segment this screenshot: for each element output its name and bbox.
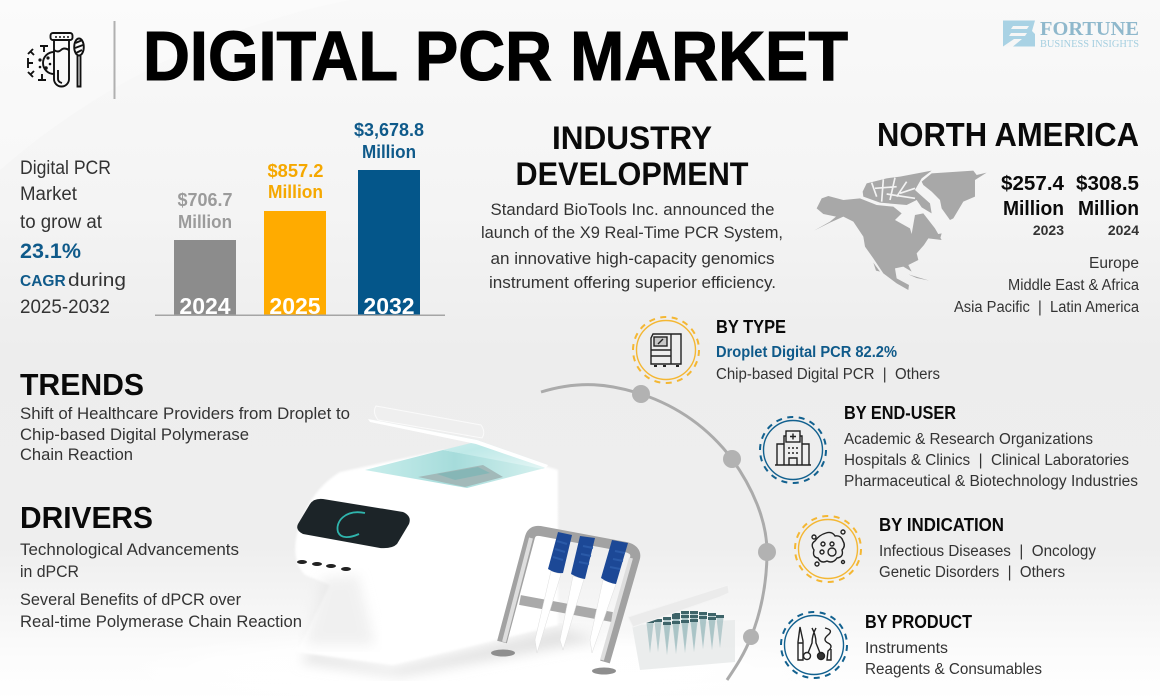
trends: Chain Reaction	[20, 445, 133, 464]
icon: surgical instruments	[781, 612, 847, 678]
north america values	[1001, 173, 1139, 238]
logo: Fortune Business Insights: FORTUNE	[1040, 18, 1139, 40]
instrument screen	[297, 499, 410, 548]
CAGR text block: CAGR	[20, 273, 66, 290]
by type text: Chip-based Digital PCR | Others	[716, 366, 940, 383]
industry development: launch of the X9 Real-Time PCR System,	[481, 223, 783, 242]
by end-user text: Pharmaceutical & Biotechnology Industries	[844, 473, 1138, 490]
icon: hospital	[760, 417, 826, 483]
by product text: BY PRODUCT	[865, 612, 972, 632]
title: DIGITAL PCR MARKET	[143, 17, 848, 95]
icon: cell	[795, 516, 861, 582]
industry development: an innovative high-capacity genomics	[490, 249, 774, 268]
industry development: DEVELOPMENT	[516, 156, 749, 192]
instrument chamber	[365, 450, 545, 488]
logo: Fortune Business Insights	[1003, 18, 1139, 50]
bar chart: market size: $857.2	[268, 160, 324, 181]
bar chart: market size: 2024	[179, 293, 231, 319]
drivers: Real-time Polymerase Chain Reaction	[20, 612, 302, 631]
map: North America	[814, 171, 987, 290]
north america values: Million	[1003, 198, 1064, 220]
north america values: 2024	[1108, 222, 1139, 238]
other regions	[954, 255, 1139, 316]
by end-user text: Academic & Research Organizations	[844, 431, 1093, 448]
drivers: DRIVERS	[20, 500, 153, 535]
illustration: tube box	[628, 585, 735, 670]
illustration: PCR instrument	[295, 406, 600, 676]
north america values: $308.5	[1076, 173, 1139, 195]
north america values: $257.4	[1001, 173, 1065, 195]
north america heading: NORTH AMERICA	[877, 116, 1139, 153]
CAGR text block: 23.1%	[20, 240, 81, 263]
pipettes	[535, 532, 628, 653]
bar chart: market size: Million	[362, 141, 416, 162]
bar chart: market size: Million	[178, 211, 232, 232]
bar chart: market size: $3,678.8	[354, 119, 424, 140]
by indication text: Infectious Diseases | Oncology	[879, 543, 1096, 560]
north america values: 2023	[1033, 222, 1064, 238]
north america values: Million	[1078, 198, 1139, 220]
other regions: Asia Pacific | Latin America	[954, 299, 1139, 316]
other regions: Europe	[1089, 255, 1139, 272]
drivers: Several Benefits of dPCR over	[20, 590, 241, 609]
industry development: INDUSTRY	[552, 120, 712, 156]
CAGR text block	[20, 158, 126, 318]
CAGR text block: Market	[20, 184, 78, 205]
trends: Chip-based Digital Polymerase	[20, 425, 249, 444]
logo: Fortune Business Insights: BUSINESS INSIGHTS	[1040, 39, 1139, 50]
by end-user text: Hospitals & Clinics | Clinical Laboratories	[844, 452, 1129, 469]
by product text: Instruments	[865, 640, 948, 657]
industry development	[481, 120, 783, 292]
bar chart: market size: Million	[268, 181, 323, 202]
instrument lid	[368, 419, 548, 469]
drivers: Technological Advancements	[20, 540, 239, 559]
header divider	[114, 21, 116, 99]
drivers	[20, 500, 302, 631]
by type text: Droplet Digital PCR 82.2%	[716, 344, 897, 361]
header icon: virus, test tube and swab	[28, 33, 84, 86]
by type text: BY TYPE	[716, 317, 786, 337]
bar chart: market size	[155, 119, 445, 319]
by indication text: Genetic Disorders | Others	[879, 564, 1065, 581]
other regions: Middle East & Africa	[1008, 277, 1139, 294]
industry development: instrument offering superior efficiency.	[489, 273, 776, 292]
bar chart: market size: $706.7	[178, 189, 232, 210]
illustration: pipette stand	[491, 531, 635, 674]
by product text: Reagents & Consumables	[865, 661, 1042, 678]
by indication text: BY INDICATION	[879, 515, 1004, 535]
CAGR text block: Digital PCR	[20, 158, 111, 179]
trends: TRENDS	[20, 367, 144, 402]
bar chart: market size: 2025	[269, 293, 321, 319]
CAGR text block: during	[68, 270, 126, 290]
CAGR text block: 2025-2032	[20, 297, 110, 318]
instrument buttons	[297, 560, 351, 571]
by type text	[716, 317, 940, 383]
CAGR text block: to grow at	[20, 212, 103, 233]
drivers: in dPCR	[20, 562, 79, 581]
by product text	[865, 612, 1042, 678]
by end-user text	[844, 403, 1138, 490]
by indication text	[879, 515, 1096, 581]
trends	[20, 367, 350, 464]
industry development: Standard BioTools Inc. announced the	[490, 200, 774, 219]
by end-user text: BY END-USER	[844, 403, 956, 423]
connector arc with nodes	[541, 385, 776, 680]
icon: PCR machine	[633, 317, 699, 383]
trends: Shift of Healthcare Providers from Droplet to	[20, 404, 350, 423]
bar chart: market size: 2032	[363, 293, 415, 319]
